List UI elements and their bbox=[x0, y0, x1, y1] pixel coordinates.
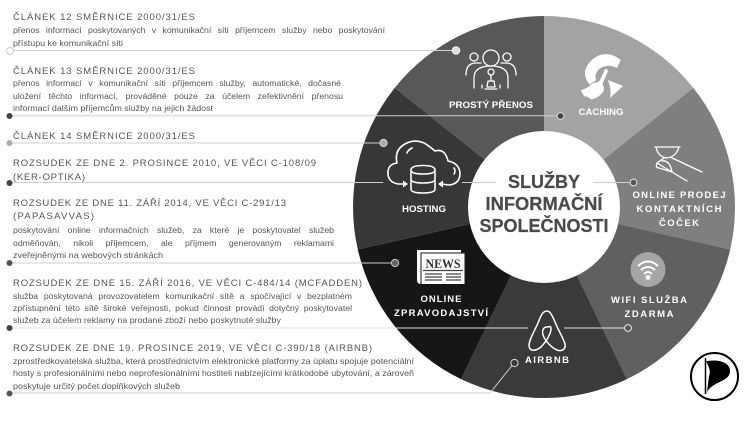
icon: wifi bbox=[630, 252, 666, 287]
label: online prodej kontaktních čoček: ČOČEK bbox=[659, 217, 699, 229]
text block: airbnb bbox=[13, 343, 415, 391]
text block: mcfadden: ROZSUDEK ZE DNE 15. ZÁŘÍ 2016, VE VĚCI C-484/14 (MCFADDEN) bbox=[13, 278, 362, 289]
center title: SLUŽBY bbox=[508, 171, 581, 192]
text block: mcfadden: služba poskytovaná provozovatelem komunikační sítě a spočívající v bezplatném bbox=[13, 291, 352, 301]
label: online prodej kontaktních čoček bbox=[632, 190, 726, 229]
segment: online prodej kontaktních čoček bbox=[544, 88, 735, 250]
icon: cloud database bbox=[388, 141, 460, 193]
text block: článek 13 bbox=[13, 66, 343, 113]
label: online zpravodajství: ONLINE bbox=[420, 294, 462, 305]
text block: airbnb: poskytuje určitý počet doplňkových služeb bbox=[13, 381, 180, 391]
icon: news bbox=[417, 250, 465, 284]
text block: mcfadden bbox=[13, 278, 362, 325]
icon: airbnb bbox=[529, 311, 565, 351]
text block: airbnb: ROZSUDEK ZE DNE 19. PROSINCE 2019, VE VĚCI C-390/18 (AIRBNB) bbox=[13, 343, 372, 354]
connector lines bbox=[10, 50, 634, 393]
center title bbox=[480, 171, 608, 236]
label: online prodej kontaktních čoček: ONLINE PRODEJ bbox=[632, 190, 726, 201]
connector dots bbox=[6, 47, 637, 396]
text block: airbnb: zprostředkovatelská služba, která prostřednictvím elektronické platformy za úplatu spojuje potenciální bbox=[13, 356, 415, 366]
text block: článek 13: přenos informací v komunikační síti příjemcem služby, automatické, dočasné bbox=[13, 78, 341, 88]
text block: článek 13: uložení těchto informací, prováděné pouze za účelem zefektivnění přenosu bbox=[13, 91, 343, 101]
text block: airbnb: hosty s profesionálními nebo neprofesionálními hostiteli nabízejícími krátkodobé ubytování, a zároveň bbox=[13, 368, 414, 378]
text block: papasavvas: (PAPASAVVAS) bbox=[13, 211, 94, 222]
segment: hosting bbox=[353, 88, 544, 250]
center title: INFORMAČNÍ bbox=[486, 193, 603, 214]
label: online zpravodajství: ZPRAVODAJSTVÍ bbox=[394, 308, 488, 319]
label: online prodej kontaktních čoček: KONTAKTNÍCH bbox=[636, 204, 722, 215]
icon: pirate party logo bbox=[691, 353, 738, 400]
text block: článek 13: ČLÁNEK 13 SMĚRNICE 2000/31/ES bbox=[13, 66, 195, 77]
icon: contact lens bbox=[655, 147, 702, 181]
label: wifi služba zdarma: ZDARMA bbox=[624, 309, 674, 320]
text block: mcfadden: služeb za účelem reklamy na prodané zboží nebo poskytnuté služby bbox=[13, 315, 282, 325]
text block: papasavvas bbox=[13, 198, 334, 260]
text block: papasavvas: ROZSUDEK ZE DNE 11. ZÁŘÍ 2014, VE VĚCI C-291/13 bbox=[13, 198, 286, 209]
label: prostý přenos: PROSTÝ PŘENOS bbox=[449, 99, 533, 111]
text block: článek 12 bbox=[13, 12, 385, 48]
text block: článek 12: přenos informací poskytovaných v komunikační síti příjemcem služby nebo poskytování bbox=[13, 25, 385, 35]
text block: článek 12: ČLÁNEK 12 SMĚRNICE 2000/31/ES bbox=[13, 12, 195, 23]
text block: papasavvas: zveřejněnými na webových stránkách bbox=[13, 250, 163, 260]
label: caching: CACHING bbox=[578, 107, 624, 118]
segment: prostý přenos bbox=[395, 16, 544, 207]
label: wifi služba zdarma bbox=[611, 294, 687, 320]
wheel diagram bbox=[353, 16, 735, 398]
text block: mcfadden: zpřístupnění této sítě široké veřejnosti, pokud činnost provádí dotyčný poskytovatel bbox=[13, 303, 352, 313]
text block: ker-optika: (KER-OPTIKA) bbox=[13, 172, 85, 183]
icon: people with microphone bbox=[466, 50, 516, 89]
icon: caching broom bbox=[580, 54, 623, 100]
center circle bbox=[468, 131, 620, 283]
icon: news: NEWS bbox=[426, 256, 460, 271]
text block: článek 14: ČLÁNEK 14 SMĚRNICE 2000/31/ES bbox=[13, 131, 195, 142]
text block: papasavvas: poskytování online informačních služeb, za které je poskytovatel služeb bbox=[13, 225, 334, 235]
text block: článek 13: informací dalším příjemcům služby na jejich žádost bbox=[13, 103, 214, 113]
text block: článek 12: přístupu ke komunikační síti bbox=[13, 38, 123, 48]
segment: caching bbox=[544, 16, 693, 207]
text block: ker-optika: ROZSUDEK ZE DNE 2. PROSINCE 2010, VE VĚCI C-108/09 bbox=[13, 158, 316, 169]
label: hosting: HOSTING bbox=[402, 204, 446, 215]
label: airbnb: AIRBNB bbox=[525, 355, 569, 366]
label: online zpravodajství bbox=[394, 294, 488, 319]
segment: wifi služba zdarma bbox=[544, 207, 730, 379]
label: wifi služba zdarma: WIFI SLUŽBA bbox=[611, 294, 687, 306]
segment: online zpravodajství bbox=[358, 207, 544, 379]
text block: ker-optika bbox=[13, 158, 316, 183]
segment: airbnb bbox=[461, 207, 627, 398]
text block: papasavvas: odměňován, nikoli příjemcem, ale příjmem generovaným reklamami bbox=[13, 238, 334, 248]
center title: SPOLEČNOSTI bbox=[480, 215, 608, 236]
